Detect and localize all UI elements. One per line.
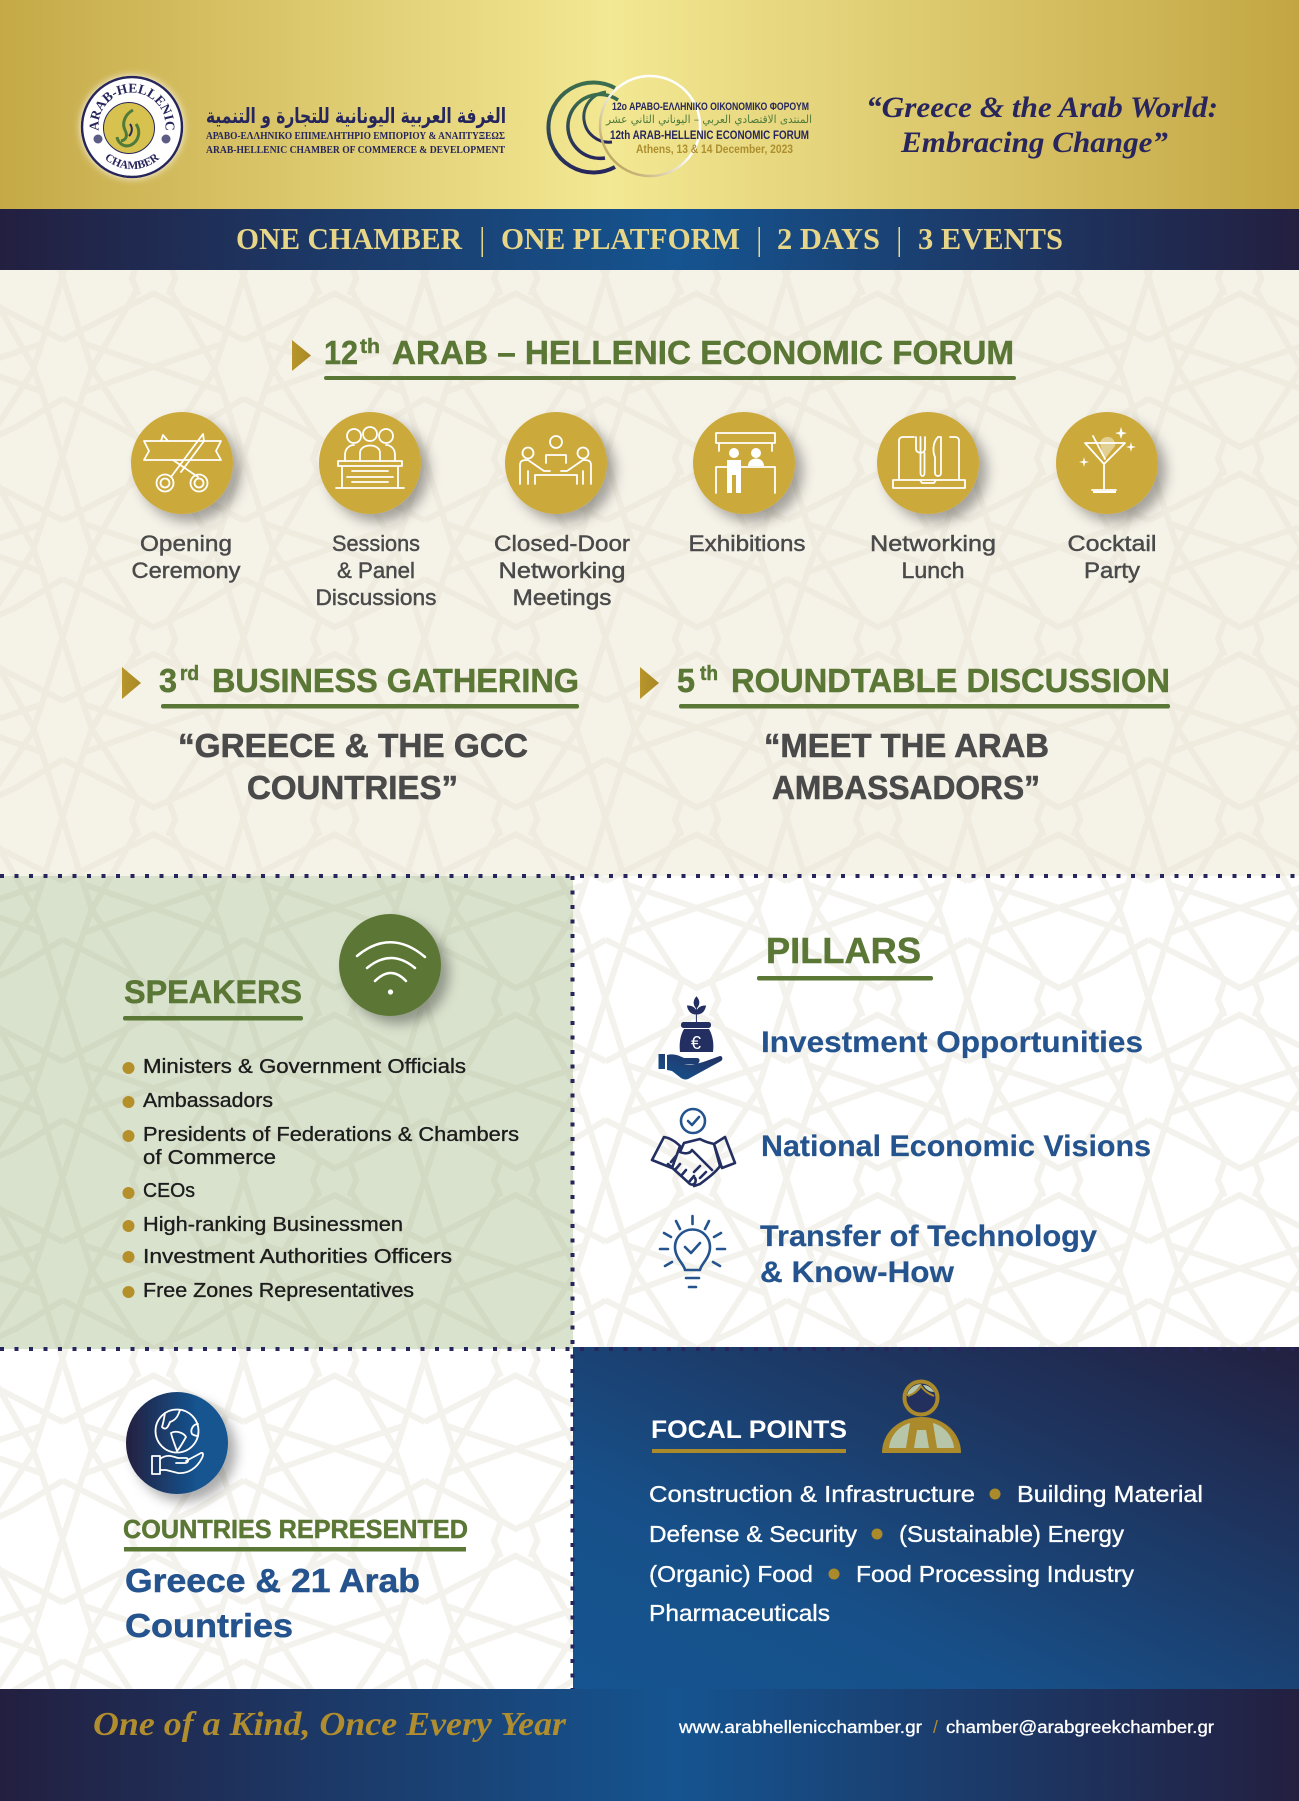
icon: networking lunch	[877, 412, 979, 514]
label: cocktail party: Party	[1084, 558, 1140, 583]
label: networking lunch: Lunch	[902, 558, 964, 583]
heading: forum	[292, 334, 1016, 380]
theme quote: Embracing Change”	[900, 126, 1168, 159]
heading: roundtable discussion	[640, 662, 1170, 708]
label: sessions and panel discussions: Sessions	[332, 531, 420, 556]
tagline band: 3 EVENTS	[918, 221, 1063, 256]
icon: opening ceremony	[131, 412, 233, 514]
heading: roundtable discussion: ROUNDTABLE DISCUSSION	[731, 662, 1170, 699]
text: transfer of technology	[760, 1220, 1097, 1289]
chamber seal logo	[75, 70, 189, 184]
list: speakers: Investment Authorities Officers	[143, 1246, 452, 1268]
heading: roundtable discussion: 5	[677, 662, 695, 699]
chamber name	[206, 104, 506, 156]
label: closed-door meetings: Meetings	[512, 585, 612, 610]
label: closed-door meetings: Closed-Door	[494, 531, 630, 556]
theme quote: “Greece & the Arab World:	[866, 91, 1218, 124]
header gold banner	[0, 0, 1299, 209]
icon: investment	[658, 997, 722, 1080]
heading: countries represented: COUNTRIES REPRESENTED	[123, 1514, 468, 1544]
label: opening ceremony: Opening	[140, 531, 232, 556]
label: cocktail party	[1068, 531, 1156, 583]
contact details: chamber@arabgreekchamber.gr	[946, 1717, 1214, 1737]
text: transfer of technology: & Know-How	[760, 1256, 955, 1289]
footer	[0, 1689, 1299, 1801]
slogan: One of a Kind, Once Every Year	[93, 1706, 567, 1743]
quote: meet the arab ambassadors	[764, 727, 1049, 806]
heading: speakers: SPEAKERS	[124, 974, 302, 1010]
icon: exhibitions	[693, 412, 795, 514]
label: closed-door meetings: Networking	[498, 558, 626, 583]
panel: events	[0, 270, 1299, 876]
quote: greece and the gcc: “GREECE & THE GCC	[178, 727, 528, 764]
list: speakers: Ministers & Government Officials	[143, 1056, 466, 1078]
icon: sessions	[319, 412, 421, 514]
list: focal points: Building Material	[1017, 1481, 1203, 1507]
tagline band: ONE PLATFORM	[501, 221, 740, 256]
list: speakers	[122, 1056, 519, 1302]
forum logo	[548, 76, 812, 176]
list: focal points: Pharmaceuticals	[649, 1600, 830, 1626]
icon: cocktail party	[1056, 412, 1158, 514]
text: investment opportunities: Investment Opportunities	[761, 1026, 1143, 1059]
icon: wifi	[339, 914, 441, 1016]
label: opening ceremony	[132, 531, 240, 583]
forum logo: المنتدى الاقتصادي العربي – اليوناني الثاني عشر	[605, 113, 812, 126]
heading: business gathering: BUSINESS GATHERING	[212, 662, 579, 699]
theme quote	[866, 91, 1218, 159]
tagline band	[0, 209, 1299, 270]
tagline band: ONE CHAMBER	[236, 221, 463, 256]
contact details: /	[933, 1717, 938, 1737]
contact details: www.arabhellenicchamber.gr	[678, 1717, 922, 1737]
heading: focal points: FOCAL POINTS	[651, 1416, 847, 1444]
list: speakers: Ambassadors	[143, 1090, 273, 1112]
list: speakers: High-ranking Businessmen	[143, 1214, 403, 1236]
heading: business gathering: rd	[180, 663, 199, 685]
list: speakers: Presidents of Federations & Chambers	[143, 1124, 519, 1146]
panel: speakers	[0, 876, 573, 1349]
quote: meet the arab ambassadors: AMBASSADORS”	[772, 769, 1040, 806]
chamber name: ARAB-HELLENIC CHAMBER OF COMMERCE & DEVELOPMENT	[206, 145, 505, 156]
icon: investment: €	[691, 1033, 701, 1053]
forum logo: 12th ARAB-HELLENIC ECONOMIC FORUM	[610, 130, 809, 142]
text: national economic visions: National Economic Visions	[761, 1130, 1151, 1163]
chamber name: ΑΡΑΒΟ-ΕΛΛΗΝΙΚΟ ΕΠΙΜΕΛΗΤΗΡΙΟ ΕΜΠΟΡΙΟΥ & ΑΝΑΠΤΥΞΕΩΣ	[206, 131, 505, 142]
list: focal points: Food Processing Industry	[856, 1561, 1135, 1587]
list: focal points	[649, 1481, 1203, 1626]
heading: roundtable discussion: th	[700, 663, 718, 685]
list: speakers: CEOs	[143, 1180, 195, 1202]
forum logo: Athens, 13 & 14 December, 2023	[636, 144, 793, 156]
list: speakers: Free Zones Representatives	[143, 1280, 414, 1302]
tagline band: 2 DAYS	[777, 221, 880, 256]
quote: greece and the gcc	[178, 727, 528, 806]
icon: person	[882, 1382, 961, 1453]
forum logo: 12ο ΑΡΑΒΟ-ΕΛΛΗΝΙΚΟ ΟΙΚΟΝΟΜΙΚΟ ΦΟΡΟΥΜ	[612, 101, 809, 113]
text: greece and 21 arab countries: Greece & 21 Arab	[125, 1562, 420, 1599]
text: greece and 21 arab countries	[125, 1562, 420, 1644]
icon: handshake	[652, 1109, 735, 1186]
quote: meet the arab ambassadors: “MEET THE ARAB	[764, 727, 1049, 764]
heading: pillars: PILLARS	[766, 930, 921, 971]
heading: business gathering: 3	[159, 662, 177, 699]
label: sessions and panel discussions: Discussions	[316, 585, 436, 610]
heading: forum: th	[360, 336, 380, 358]
text: transfer of technology: Transfer of Technology	[760, 1220, 1097, 1253]
contact details	[678, 1717, 1214, 1737]
heading: forum: 12	[324, 334, 358, 371]
text: greece and 21 arab countries: Countries	[125, 1607, 293, 1644]
panel: countries represented	[0, 1349, 573, 1689]
icon: closed-door meetings	[505, 412, 607, 514]
chamber name: الغرفة العربية اليونانية للتجارة و التنمية	[206, 104, 506, 128]
quote: greece and the gcc: COUNTRIES”	[247, 769, 458, 806]
heading: business gathering	[122, 662, 579, 708]
panel: focal points	[573, 1347, 1299, 1689]
icon: globe in hand	[126, 1392, 228, 1494]
label: sessions and panel discussions	[316, 531, 436, 610]
label: exhibitions: Exhibitions	[688, 531, 806, 556]
heading: forum: ARAB – HELLENIC ECONOMIC FORUM	[392, 334, 1014, 371]
list: focal points: Defense & Security	[649, 1521, 858, 1547]
label: cocktail party: Cocktail	[1068, 531, 1156, 556]
label: closed-door meetings	[494, 531, 630, 610]
chamber seal logo: ARAB-HELLENIC	[90, 84, 174, 131]
label: networking lunch: Networking	[870, 531, 996, 556]
panel: pillars	[573, 876, 1299, 1349]
label: opening ceremony: Ceremony	[132, 558, 240, 583]
label: networking lunch	[870, 531, 996, 583]
list: speakers: of Commerce	[143, 1147, 276, 1169]
chamber seal logo: CHAMBER	[106, 154, 160, 170]
list: focal points: (Sustainable) Energy	[899, 1521, 1125, 1547]
list: focal points: Construction & Infrastructure	[649, 1481, 975, 1507]
list: focal points: (Organic) Food	[649, 1561, 813, 1587]
icon: lightbulb	[660, 1216, 725, 1287]
label: sessions and panel discussions: & Panel	[337, 558, 415, 583]
